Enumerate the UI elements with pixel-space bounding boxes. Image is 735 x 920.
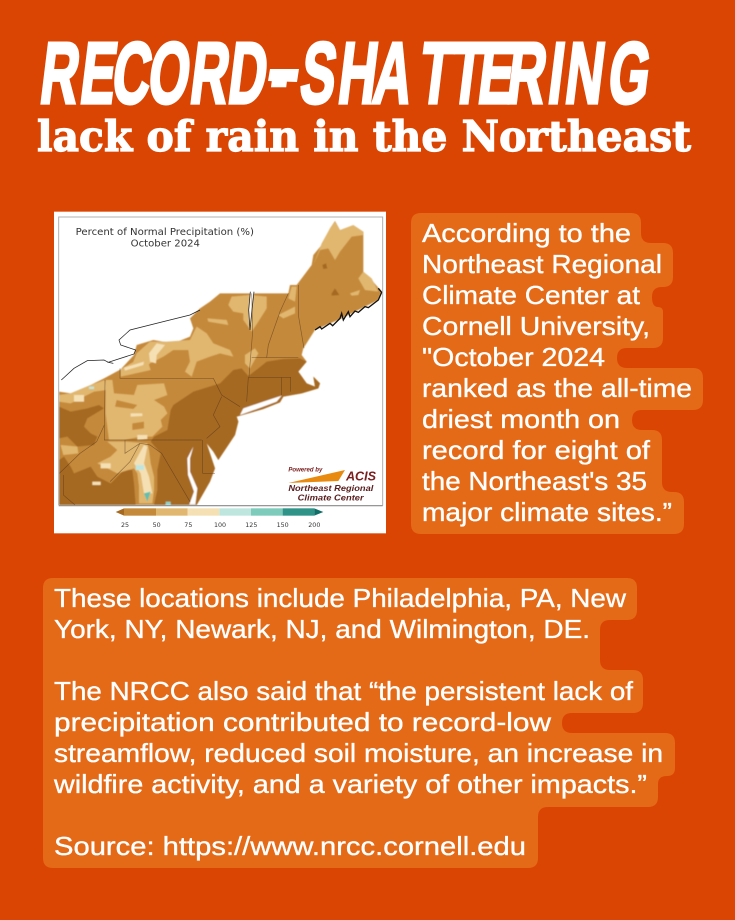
logo: ACIS Northeast Regional Climate Center: Powered by	[288, 467, 323, 474]
Maine coast	[315, 288, 382, 330]
impacts quote: wildfire activity, and a variety of other impacts.”	[53, 769, 647, 799]
color legend: 25	[121, 522, 129, 529]
paragraph: Cornell University,	[422, 311, 650, 341]
map heading	[76, 227, 254, 249]
color legend	[116, 508, 323, 529]
map land regions	[59, 221, 382, 505]
impacts quote	[53, 676, 663, 799]
panel: NRCC driest month text	[411, 213, 703, 534]
map heading: October 2024	[131, 238, 200, 249]
title line: record-shattering: RECORD-SHATTERING	[36, 26, 656, 122]
great lakes and coast lines	[61, 292, 254, 380]
title	[36, 26, 692, 161]
locations sentence: These locations include Philadelphia, PA, New	[54, 583, 626, 613]
paragraph: ranked as the all-time	[422, 373, 692, 403]
color legend: 100	[214, 522, 226, 529]
state borders	[59, 285, 304, 505]
locations sentence	[54, 583, 626, 644]
paragraph: record for eight of	[422, 435, 651, 465]
paragraph: "October 2024	[422, 342, 605, 372]
impacts quote: precipitation contributed to record-low	[54, 707, 551, 737]
paragraph: the Northeast's 35	[422, 466, 647, 496]
subtitle: lack of rain in the Northeast	[37, 112, 692, 161]
source line: Source: https://www.nrcc.cornell.edu	[54, 831, 526, 861]
locations sentence: York, NY, Newark, NJ, and Wilmington, DE.	[54, 614, 590, 644]
logo: ACIS Northeast Regional Climate Center: Climate Center	[298, 492, 365, 502]
paragraph: major climate sites.”	[422, 497, 672, 527]
map frame	[59, 217, 383, 506]
color legend: 125	[245, 522, 257, 529]
paragraph: According to the	[422, 218, 631, 248]
logo: ACIS Northeast Regional Climate Center	[288, 467, 377, 502]
paragraph: Climate Center at	[422, 280, 641, 310]
paragraph	[422, 218, 692, 527]
color legend: 75	[184, 522, 192, 529]
water cut-outs	[240, 396, 282, 415]
color legend: 200	[308, 522, 320, 529]
panel: precipitation map	[54, 212, 386, 533]
paragraph: Northeast Regional	[422, 249, 662, 279]
color legend: 150	[277, 522, 289, 529]
logo: ACIS Northeast Regional Climate Center: ACIS	[345, 469, 377, 483]
paragraph: driest month on	[422, 404, 620, 434]
color legend: 50	[153, 522, 161, 529]
panel: locations and impacts text	[43, 578, 675, 868]
impacts quote: streamflow, reduced soil moisture, an increase in	[54, 738, 663, 768]
map heading: Percent of Normal Precipitation (%)	[76, 227, 254, 238]
impacts quote: The NRCC also said that “the persistent lack of	[54, 676, 634, 706]
logo: ACIS Northeast Regional Climate Center: Northeast Regional	[288, 483, 374, 493]
